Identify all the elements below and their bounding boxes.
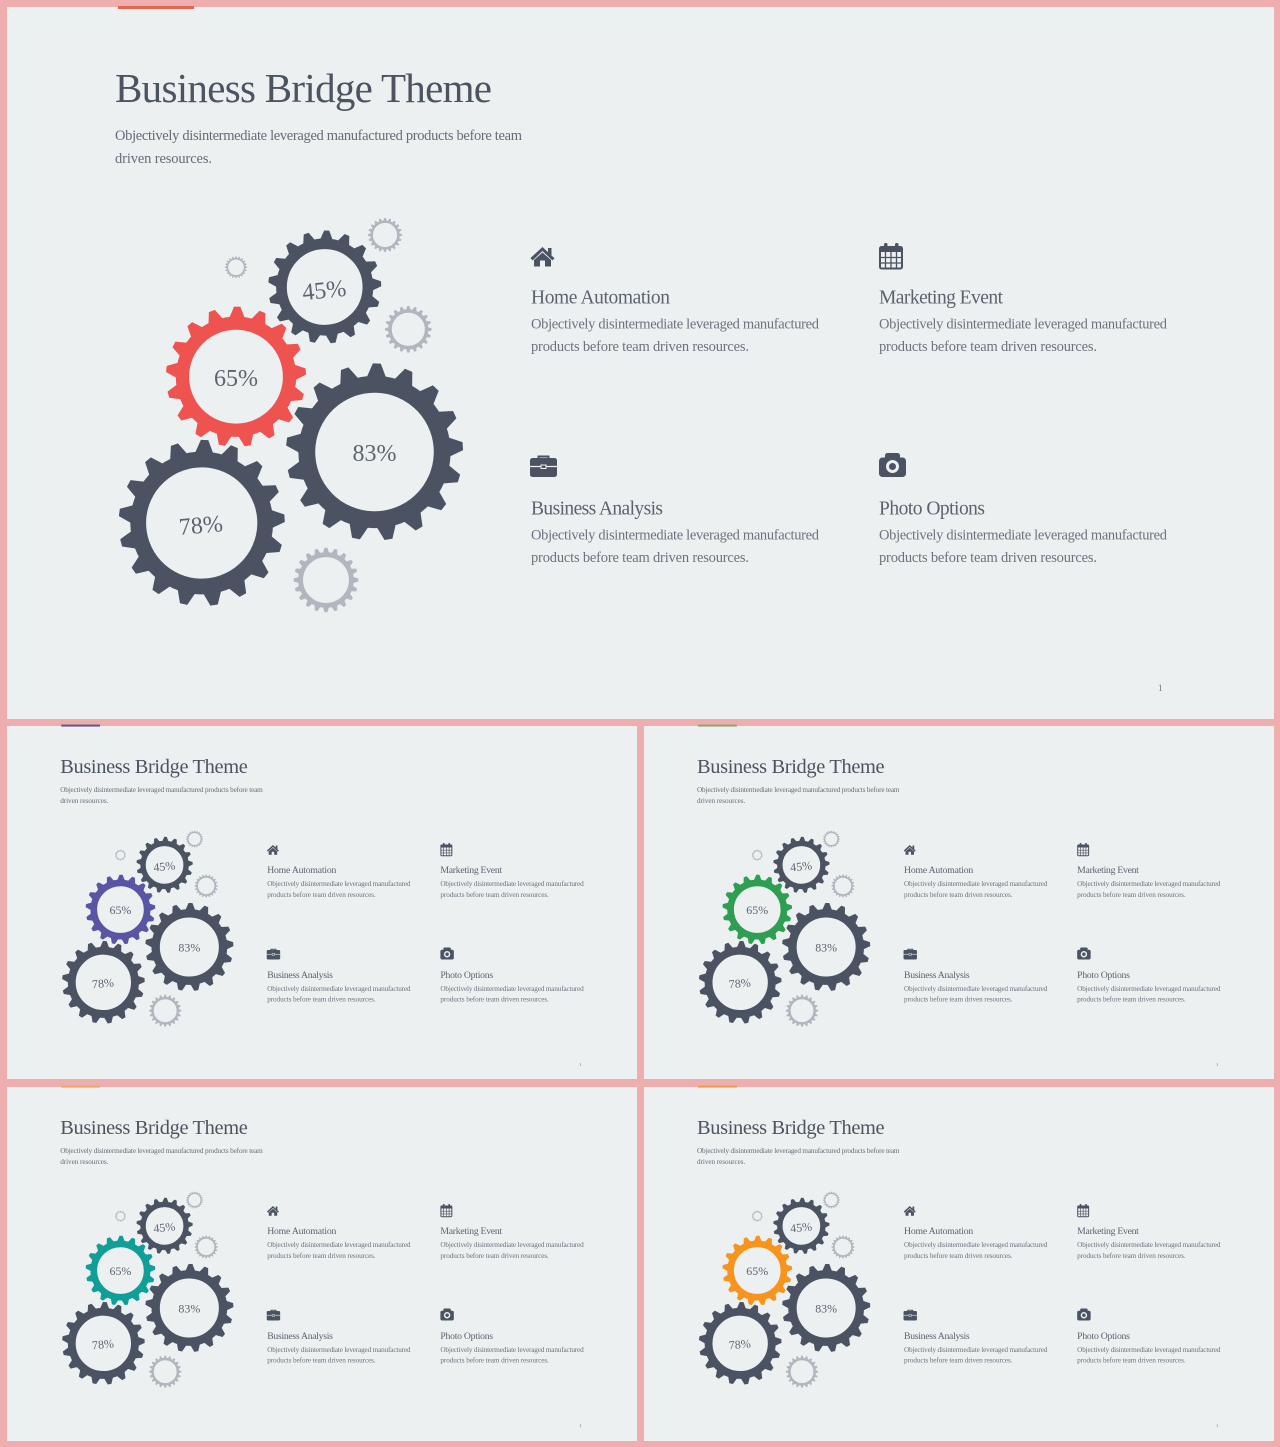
feature: Home Automation: products before team driven resources.: [531, 339, 749, 355]
feature: Business Analysis: products before team driven resources.: [904, 1357, 1013, 1365]
icon: camera: [1077, 1309, 1091, 1320]
subtitle: [60, 1147, 263, 1166]
feature: Marketing Event: Objectively disintermediate leveraged manufactured: [1077, 1241, 1221, 1249]
small gear: [195, 1235, 218, 1259]
gear 65%: [85, 1235, 156, 1306]
feature: Home Automation: Objectively disintermediate leveraged manufactured: [267, 1241, 411, 1249]
accent bar: [118, 6, 194, 9]
gear 65%: 65%: [746, 1264, 768, 1278]
gear 83%: [781, 902, 872, 992]
feature: Marketing Event: Marketing Event: [440, 1226, 502, 1237]
icon: calendar: [441, 843, 452, 856]
subtitle: Objectively disintermediate leveraged manufactured products before team: [697, 1147, 900, 1155]
feature: Photo Options: [1077, 948, 1221, 1004]
icon: camera: [1077, 948, 1091, 959]
feature: Business Analysis: Business Analysis: [267, 970, 333, 981]
feature: Marketing Event: [879, 243, 1168, 355]
feature: Business Analysis: [267, 949, 411, 1004]
feature: Business Analysis: Business Analysis: [267, 1331, 333, 1342]
feature: Business Analysis: [267, 1310, 411, 1365]
icon: house: [267, 845, 279, 855]
small gear: [368, 218, 402, 252]
slide 2: purple theme: [7, 725, 637, 1079]
gear 78%: [697, 1301, 783, 1386]
feature: Marketing Event: [440, 843, 584, 899]
small gear: [385, 306, 432, 353]
feature: Home Automation: Home Automation: [267, 865, 337, 876]
feature: Business Analysis: Objectively disintermediate leveraged manufactured: [904, 985, 1048, 993]
feature: Home Automation: Objectively disintermediate leveraged manufactured: [531, 316, 820, 332]
icon: briefcase: [530, 456, 557, 477]
gear cluster: [115, 218, 466, 612]
gear 45%: [266, 229, 383, 346]
small gear: [752, 1211, 763, 1222]
gear 83%: [781, 1263, 872, 1353]
feature: Marketing Event: [1077, 843, 1221, 899]
gear 45%: 45%: [789, 858, 813, 875]
feature: Home Automation: products before team driven resources.: [267, 891, 376, 899]
gear 65%: [164, 305, 308, 448]
small gear: [786, 1356, 818, 1388]
gear 78%: [60, 1301, 146, 1386]
slide 4: teal theme: [7, 1086, 637, 1441]
feature: Business Analysis: [904, 1310, 1048, 1365]
gear cluster: [697, 831, 872, 1027]
small gear: [786, 995, 818, 1027]
small gear: [195, 874, 218, 898]
gear 65%: [85, 874, 156, 945]
slide 5: orange theme: [644, 1086, 1274, 1441]
gear 78%: 78%: [728, 1336, 751, 1352]
subtitle: driven resources.: [60, 797, 109, 805]
gear cluster: [697, 1192, 872, 1388]
icon: briefcase: [904, 1310, 917, 1320]
subtitle: [697, 1147, 900, 1166]
icon: camera: [879, 453, 906, 477]
feature: Photo Options: products before team driven resources.: [879, 550, 1097, 566]
gear 83%: 83%: [178, 1301, 200, 1315]
feature: Business Analysis: products before team driven resources.: [531, 550, 749, 566]
title: Business Bridge Theme: [697, 756, 885, 778]
feature: Business Analysis: Objectively disintermediate leveraged manufactured: [267, 985, 411, 993]
gear 45%: [135, 1197, 194, 1255]
feature: Photo Options: products before team driven resources.: [440, 1357, 549, 1365]
slide 1: red theme, large: [7, 6, 1274, 719]
gear 83%: 83%: [178, 940, 200, 954]
gear 45%: 45%: [153, 858, 176, 875]
gear 45%: [772, 1197, 831, 1255]
small gear: [186, 831, 203, 847]
title: Business Bridge Theme: [60, 756, 248, 778]
feature: Marketing Event: products before team driven resources.: [879, 339, 1097, 355]
feature: Business Analysis: [904, 949, 1048, 1004]
feature: Photo Options: [1077, 1309, 1221, 1365]
gear 78%: 78%: [91, 1336, 114, 1352]
feature: Photo Options: [440, 1309, 584, 1365]
page number: 1: [1158, 683, 1162, 693]
small gear: [115, 850, 126, 861]
icon: briefcase: [267, 949, 280, 959]
page number: 1: [1216, 1062, 1218, 1067]
small gear: [752, 850, 763, 861]
feature: Home Automation: [267, 1206, 411, 1260]
subtitle: Objectively disintermediate leveraged manufactured products before team: [60, 1147, 263, 1155]
feature: Photo Options: Photo Options: [440, 970, 493, 981]
gear cluster: [60, 831, 235, 1027]
gear 83%: 83%: [815, 940, 837, 954]
feature: Home Automation: [530, 247, 820, 355]
title: Business Bridge Theme: [60, 1117, 248, 1139]
icon: calendar: [1078, 843, 1089, 856]
subtitle: Objectively disintermediate leveraged manufactured products before team: [115, 128, 523, 144]
subtitle: [115, 128, 523, 167]
small gear: [149, 1356, 181, 1388]
accent bar: [61, 1086, 100, 1088]
subtitle: Objectively disintermediate leveraged manufactured products before team: [697, 786, 900, 794]
feature: Business Analysis: Business Analysis: [904, 970, 970, 981]
gear 78%: 78%: [178, 511, 224, 541]
feature: Marketing Event: products before team driven resources.: [1077, 891, 1186, 899]
subtitle: driven resources.: [697, 1158, 745, 1166]
feature: Photo Options: Photo Options: [1077, 1331, 1130, 1342]
feature: Photo Options: products before team driven resources.: [1077, 996, 1186, 1004]
feature: Marketing Event: Marketing Event: [1077, 1226, 1139, 1237]
feature: Business Analysis: products before team driven resources.: [267, 1357, 376, 1365]
gear 65%: 65%: [109, 903, 131, 917]
feature: Marketing Event: products before team driven resources.: [1077, 1252, 1186, 1260]
feature: Home Automation: Objectively disintermediate leveraged manufactured: [904, 880, 1048, 888]
icon: house: [530, 247, 554, 266]
feature: Photo Options: Photo Options: [879, 498, 985, 520]
gear 65%: 65%: [109, 1264, 131, 1278]
small gear: [294, 548, 358, 612]
feature: Marketing Event: Objectively disintermediate leveraged manufactured: [1077, 880, 1221, 888]
feature: Home Automation: [904, 845, 1048, 899]
feature: Home Automation: Objectively disintermediate leveraged manufactured: [904, 1241, 1048, 1249]
feature: Business Analysis: products before team driven resources.: [267, 996, 376, 1004]
feature: Marketing Event: [1077, 1204, 1221, 1260]
icon: calendar: [441, 1204, 452, 1217]
gear 78%: [115, 437, 288, 609]
feature: Photo Options: Objectively disintermediate leveraged manufactured: [879, 528, 1168, 544]
gear 78%: 78%: [728, 975, 751, 991]
feature: Marketing Event: Marketing Event: [1077, 865, 1139, 876]
feature: Photo Options: Objectively disintermediate leveraged manufactured: [1077, 1346, 1221, 1354]
gear 45%: 45%: [789, 1219, 813, 1236]
feature: Photo Options: Photo Options: [1077, 970, 1130, 981]
page number: 1: [579, 1062, 581, 1067]
feature: Business Analysis: Business Analysis: [904, 1331, 970, 1342]
gear 45%: [772, 836, 831, 894]
feature: Photo Options: products before team driven resources.: [440, 996, 549, 1004]
title: Business Bridge Theme: [115, 65, 492, 111]
small gear: [115, 1211, 126, 1222]
feature: Business Analysis: Objectively disintermediate leveraged manufactured: [531, 528, 820, 544]
accent bar: [698, 725, 737, 727]
feature: Home Automation: products before team driven resources.: [904, 1252, 1013, 1260]
feature: Home Automation: Home Automation: [904, 865, 973, 876]
gear 78%: [697, 940, 783, 1025]
gear 65%: [722, 1235, 793, 1306]
small gear: [186, 1192, 203, 1208]
gear 65%: 65%: [746, 903, 768, 917]
icon: camera: [440, 948, 454, 959]
icon: briefcase: [267, 1310, 280, 1320]
feature: Business Analysis: Objectively disintermediate leveraged manufactured: [904, 1346, 1048, 1354]
feature: Marketing Event: Objectively disintermediate leveraged manufactured: [879, 316, 1168, 332]
icon: calendar: [1078, 1204, 1089, 1217]
title: Business Bridge Theme: [697, 1117, 885, 1139]
subtitle: driven resources.: [60, 1158, 109, 1166]
feature: Home Automation: products before team driven resources.: [267, 1252, 376, 1260]
subtitle: Objectively disintermediate leveraged manufactured products before team: [60, 786, 263, 794]
gear 83%: 83%: [352, 441, 396, 467]
feature: Marketing Event: products before team driven resources.: [440, 891, 549, 899]
small gear: [823, 831, 840, 847]
accent bar: [61, 725, 100, 727]
gear 83%: 83%: [815, 1301, 837, 1315]
feature: Home Automation: Home Automation: [904, 1226, 973, 1237]
feature: Photo Options: [440, 948, 584, 1004]
feature: Photo Options: Photo Options: [440, 1331, 493, 1342]
feature: Photo Options: Objectively disintermediate leveraged manufactured: [440, 985, 584, 993]
icon: briefcase: [904, 949, 917, 959]
gear 83%: [283, 361, 466, 543]
feature: Home Automation: Objectively disintermediate leveraged manufactured: [267, 880, 411, 888]
page number: 1: [1216, 1423, 1218, 1428]
small gear: [225, 256, 247, 278]
slide 3: green theme: [644, 725, 1274, 1079]
small gear: [149, 995, 181, 1027]
page number: 1: [579, 1423, 581, 1428]
subtitle: [697, 786, 900, 805]
feature: Business Analysis: [530, 456, 820, 566]
feature: Photo Options: products before team driven resources.: [1077, 1357, 1186, 1365]
gear 45%: 45%: [301, 276, 348, 306]
gear 65%: 65%: [214, 366, 258, 392]
feature: Photo Options: [879, 453, 1168, 566]
feature: Home Automation: Home Automation: [267, 1226, 337, 1237]
gear 78%: 78%: [91, 975, 114, 991]
gear 65%: [722, 874, 793, 945]
feature: Business Analysis: Business Analysis: [531, 498, 663, 520]
gear 83%: [144, 1263, 235, 1353]
feature: Home Automation: Home Automation: [531, 288, 670, 308]
gear 83%: [144, 902, 235, 992]
feature: Marketing Event: Objectively disintermediate leveraged manufactured: [440, 1241, 584, 1249]
feature: Marketing Event: [440, 1204, 584, 1260]
feature: Photo Options: Objectively disintermediate leveraged manufactured: [440, 1346, 584, 1354]
feature: Home Automation: [904, 1206, 1048, 1260]
gear 45%: 45%: [153, 1219, 176, 1236]
accent bar: [698, 1086, 737, 1088]
subtitle: [60, 786, 263, 805]
icon: house: [904, 845, 916, 855]
feature: Marketing Event: products before team driven resources.: [440, 1252, 549, 1260]
subtitle: driven resources.: [697, 797, 745, 805]
feature: Home Automation: products before team driven resources.: [904, 891, 1013, 899]
subtitle: driven resources.: [115, 151, 212, 167]
icon: calendar: [880, 243, 902, 268]
small gear: [831, 1235, 855, 1259]
small gear: [831, 874, 855, 898]
feature: Business Analysis: products before team driven resources.: [904, 996, 1013, 1004]
feature: Marketing Event: Marketing Event: [879, 288, 1004, 308]
icon: camera: [440, 1309, 454, 1320]
gear 45%: [135, 836, 194, 894]
feature: Marketing Event: Marketing Event: [440, 865, 502, 876]
feature: Home Automation: [267, 845, 411, 899]
gear 78%: [60, 940, 146, 1025]
feature: Marketing Event: Objectively disintermediate leveraged manufactured: [440, 880, 584, 888]
icon: house: [267, 1206, 279, 1216]
icon: house: [904, 1206, 916, 1216]
gear cluster: [60, 1192, 235, 1388]
small gear: [823, 1192, 840, 1208]
feature: Photo Options: Objectively disintermediate leveraged manufactured: [1077, 985, 1221, 993]
feature: Business Analysis: Objectively disintermediate leveraged manufactured: [267, 1346, 411, 1354]
